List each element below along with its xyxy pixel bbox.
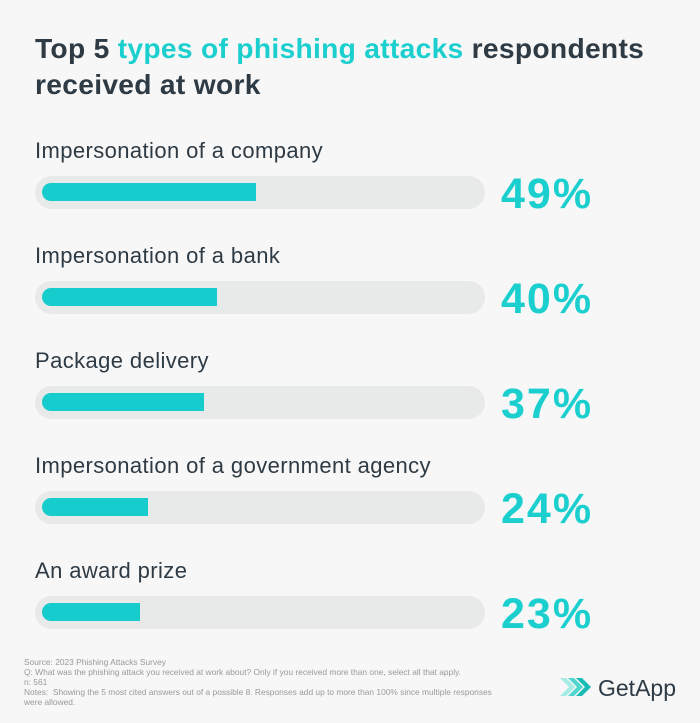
title <box>35 32 644 100</box>
row: package: Package delivery <box>35 348 209 373</box>
row: company: 49% <box>501 170 593 218</box>
title: Top 5 types of phishing attacks respondents <box>35 32 644 64</box>
row: government <box>35 453 593 533</box>
row: bank: 40% <box>501 275 593 323</box>
title: received at work <box>35 68 261 100</box>
row: bank <box>35 243 593 323</box>
footnote: Source: 2023 Phishing Attacks Survey <box>24 657 166 667</box>
row: award <box>35 558 593 638</box>
bar: 40% <box>35 281 485 314</box>
row: company: Impersonation of a company <box>35 138 323 163</box>
row: package: 37% <box>501 380 593 428</box>
row: award: 23% <box>501 590 593 638</box>
row: government: 24% <box>501 485 593 533</box>
row: company <box>35 138 593 218</box>
row: government: Impersonation of a government agency <box>35 453 431 478</box>
footnote: were allowed. <box>24 697 75 707</box>
row: award: An award prize <box>35 558 187 583</box>
footnote: Notes: Showing the 5 most cited answers out of a possible 8. Responses add up to more than 100% since multiple responses <box>24 687 492 697</box>
footnote: n: 561 <box>24 677 47 687</box>
footnote: Q: What was the phishing attack you received at work about? Only if you received more than one, select all that apply. <box>24 667 461 677</box>
logo: GetApp <box>560 675 676 701</box>
bar: 23% <box>35 596 485 629</box>
row: bank: Impersonation of a bank <box>35 243 280 268</box>
logo: GetApp: GetApp <box>598 675 676 701</box>
bar: 37% <box>35 386 485 419</box>
bar: 49% <box>35 176 485 209</box>
row: package <box>35 348 593 428</box>
bar: 24% <box>35 491 485 524</box>
footnote <box>24 657 492 707</box>
